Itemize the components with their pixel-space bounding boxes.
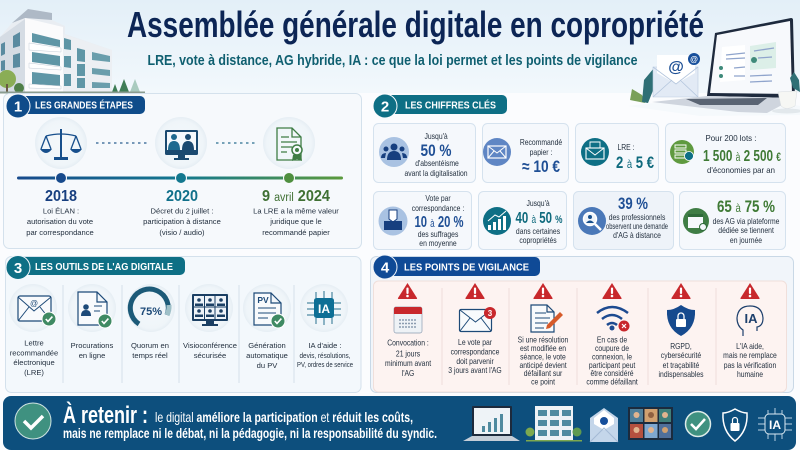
tool: lettre recommandée: recommandée bbox=[10, 348, 58, 358]
icon: coins bbox=[670, 140, 694, 164]
stat card: économies: 1 500 à 2 500 € bbox=[703, 148, 781, 165]
milestone 2020 bbox=[143, 188, 221, 237]
tool: IA d'aide: devis, résolutions, bbox=[300, 353, 351, 360]
tool: IA d'aide bbox=[297, 284, 353, 369]
icon: magnifier bbox=[578, 207, 606, 235]
tool: visioconférence sécurisée: Visioconférence bbox=[183, 341, 237, 350]
dotted connector bbox=[216, 142, 256, 144]
vigilance: résolution modifiée: séance, le vote bbox=[520, 352, 566, 362]
tool: génération du PV: automatique bbox=[246, 351, 288, 360]
icon: calendar clock bbox=[683, 208, 709, 234]
vigilance: vote par correspondance: 3 jours avant l'AG bbox=[448, 365, 502, 375]
icon: group of people bbox=[379, 137, 409, 167]
vigilance: résolution modifiée: Si une résolution bbox=[518, 335, 568, 345]
milestone 2020: 2020 bbox=[166, 188, 198, 205]
icon: balance bbox=[35, 117, 87, 169]
tool: quorum 75 % gauge: Quorum en bbox=[131, 341, 169, 350]
illustration: laptop, envelope, plants and cup: @ bbox=[690, 55, 698, 64]
milestone 2018: 2018 bbox=[45, 188, 77, 205]
icon: video grid bbox=[628, 407, 673, 440]
icon: building bbox=[526, 406, 582, 442]
vigilance: convocation: 21 jours bbox=[396, 349, 420, 359]
stat card: économies: d'économies par an bbox=[707, 165, 775, 175]
vigilance: coupure de connexion: être considéré bbox=[590, 368, 634, 378]
illustration: laptop, envelope, plants and cup: @ bbox=[668, 59, 684, 76]
heading: les points de vigilance: LES POINTS DE VIGILANCE bbox=[404, 262, 529, 274]
tool: génération du PV: Génération bbox=[248, 341, 286, 350]
tool: quorum 75 % gauge: 75% bbox=[140, 306, 162, 318]
vigilance: IA bbox=[723, 283, 777, 379]
heading: les outils bbox=[6, 256, 185, 280]
vigilance: résolution modifiée: défaillant sur bbox=[524, 368, 563, 378]
vigilance: RGPD bbox=[659, 283, 704, 379]
heading: les points de vigilance: 4 bbox=[381, 260, 390, 276]
tool: lettre recommandée: électronique bbox=[13, 358, 55, 367]
vigilance: convocation bbox=[385, 283, 432, 378]
vigilance: résolution modifiée bbox=[518, 283, 568, 387]
tool: lettre recommandée: (LRE) bbox=[24, 368, 44, 377]
tool: lettre recommandée bbox=[9, 284, 58, 377]
stat card: recommandé papier: ≈ 10 € bbox=[522, 157, 560, 176]
tool: quorum 75 % gauge bbox=[127, 284, 175, 360]
vigilance: convocation: l'AG bbox=[402, 368, 414, 378]
stat card: 65 à 75 %: des AG via plateforme bbox=[713, 216, 779, 226]
icon: certified document bbox=[263, 117, 315, 169]
stat card: LRE: 2 à 5 € bbox=[616, 153, 654, 172]
icon: visioconference bbox=[155, 117, 207, 169]
heading: les points de vigilance bbox=[373, 255, 540, 279]
stat card: vote par correspondance: des suffrages bbox=[418, 229, 459, 239]
vigilance: résolution modifiée: anticipé devient bbox=[519, 360, 568, 370]
heading: les outils: LES OUTILS DE L'AG DIGITALE bbox=[35, 262, 173, 273]
stat card: 65 à 75 % bbox=[680, 192, 786, 250]
vigilance: IA: L'IA aide, bbox=[736, 341, 764, 351]
icon: IA chip bbox=[758, 408, 792, 441]
stat card: vote par correspondance: en moyenne bbox=[419, 238, 457, 248]
key message: À retenir : bbox=[63, 401, 148, 429]
stat card: 50 % absentéisme: Jusqu'à bbox=[424, 131, 448, 141]
vigilance: IA: mais ne remplace bbox=[723, 350, 777, 360]
icon: green check bbox=[686, 412, 710, 436]
tool: lettre recommandée: Lettre bbox=[24, 338, 44, 348]
vigilance: RGPD: cybersécurité bbox=[661, 350, 701, 360]
vigilance: coupure de connexion: comme défaillant bbox=[586, 377, 639, 387]
tool: quorum 75 % gauge: temps réel bbox=[132, 351, 168, 360]
banner: à retenir bbox=[3, 396, 796, 450]
vigilance: coupure de connexion: participant peut bbox=[589, 360, 636, 370]
panel 4: les points de vigilance bbox=[370, 255, 794, 392]
vigilance dividers bbox=[442, 288, 716, 385]
stat card: 50 % absentéisme: 50 % bbox=[420, 141, 452, 160]
tool: procurations en ligne bbox=[68, 284, 116, 360]
stat card: recommandé papier bbox=[482, 124, 568, 182]
vigilance: convocation: minimum avant bbox=[385, 358, 432, 368]
stat card: 39 %: observent une demande bbox=[606, 222, 668, 231]
stat card: LRE: LRE : bbox=[618, 142, 634, 152]
vigilance: vote par correspondance: doit parvenir bbox=[456, 356, 494, 366]
stat card: vote par correspondance bbox=[374, 192, 472, 250]
vigilance: IA: humaine bbox=[737, 369, 763, 379]
illustration: laptop, envelope, plants and cup bbox=[628, 18, 800, 116]
key message bbox=[63, 401, 437, 441]
key message: mais ne remplace ni le débat, ni la pédagogie, ni la responsabilité du syndic. bbox=[63, 425, 437, 441]
key message: le digital améliore la participation et réduit les coûts, bbox=[155, 409, 413, 425]
stat card: 65 à 75 %: 65 à 75 % bbox=[717, 197, 775, 216]
stat card: 39 %: 39 % bbox=[618, 194, 648, 213]
stat card: LRE bbox=[576, 124, 658, 182]
stat card: 39 % bbox=[574, 192, 674, 250]
tool: visioconférence sécurisée bbox=[183, 284, 237, 360]
stat card: 40 à 50 %: Jusqu'à bbox=[526, 198, 550, 208]
vigilance: coupure de connexion: connexion, le bbox=[592, 352, 632, 362]
tool dividers bbox=[63, 285, 294, 383]
stat card: 50 % absentéisme bbox=[374, 124, 476, 182]
timeline bbox=[17, 172, 343, 184]
tool: procurations en ligne: Procurations bbox=[71, 341, 114, 350]
heading: les outils: 3 bbox=[14, 260, 22, 277]
stat card: recommandé papier: papier : bbox=[530, 147, 552, 157]
heading: les grandes étapes bbox=[6, 94, 145, 118]
stat card: 40 à 50 %: copropriétés bbox=[519, 235, 557, 245]
vigilance: coupure de connexion bbox=[586, 283, 639, 387]
stat card: 65 à 75 %: en journée bbox=[730, 235, 762, 245]
stat card: 40 à 50 %: 40 à 50 % bbox=[516, 210, 563, 227]
icon: rising chart bbox=[483, 207, 511, 235]
milestone 2018 bbox=[26, 188, 94, 237]
vigilance: vote par correspondance bbox=[448, 283, 502, 375]
tool: lettre recommandée: @ bbox=[30, 299, 38, 308]
tool: IA d'aide: IA d'aide : bbox=[308, 341, 342, 350]
vigilance: coupure de connexion: coupure de bbox=[595, 343, 629, 353]
tool: IA d'aide: IA bbox=[318, 302, 330, 316]
icon: ballot box bbox=[378, 206, 408, 236]
vigilance: IA: pas la vérification bbox=[724, 360, 776, 370]
vigilance: résolution modifiée: est modifiée en bbox=[520, 343, 566, 353]
vigilance: résolution modifiée: ce point bbox=[531, 377, 556, 387]
icon: laptop chart bbox=[463, 406, 520, 441]
milestone 2024 bbox=[253, 188, 339, 237]
stat card: recommandé papier: Recommandé bbox=[520, 137, 562, 147]
heading: les grandes étapes: 1 bbox=[14, 98, 22, 116]
milestone 2024: La LRE a la même valeur bbox=[253, 206, 339, 216]
header band bbox=[0, 0, 800, 93]
vigilance: RGPD: et traçabilité bbox=[663, 360, 699, 370]
inner alert area bbox=[374, 281, 786, 392]
milestone 2020: (visio / audio) bbox=[159, 228, 205, 237]
panel 3: les outils de l'AG digitale bbox=[6, 256, 361, 392]
panel 1: les grandes étapes bbox=[4, 94, 362, 248]
heading: les chiffres clés: 2 bbox=[381, 98, 389, 116]
illustration: apartment building bbox=[0, 9, 145, 94]
milestone 2024: juridique que le bbox=[269, 217, 322, 226]
icon: IA chip: IA bbox=[769, 418, 781, 432]
stat card: 39 %: d'AG à distance bbox=[613, 230, 661, 240]
dotted connector bbox=[96, 142, 148, 144]
vigilance: RGPD: RGPD, bbox=[670, 341, 692, 351]
icon: check mark bbox=[15, 403, 51, 439]
milestone 2018: par correspondance bbox=[26, 228, 94, 237]
milestone 2024: recommandé papier bbox=[262, 228, 330, 237]
tool: IA d'aide: PV, ordres de service bbox=[297, 362, 353, 369]
stat card: économies: Pour 200 lots : bbox=[706, 133, 756, 143]
vigilance: vote par correspondance: 3 bbox=[488, 309, 493, 318]
stat card: 50 % absentéisme: d'absentéisme bbox=[415, 158, 459, 168]
milestone 2020: Décret du 2 juillet : bbox=[151, 206, 213, 216]
stat card: 40 à 50 % bbox=[478, 192, 566, 250]
vigilance: IA: IA bbox=[744, 311, 758, 326]
milestone 2018: autorisation du vote bbox=[27, 217, 93, 226]
stat card: 50 % absentéisme: avant la digitalisation bbox=[404, 168, 468, 178]
stat card: 39 %: des professionnels bbox=[609, 212, 666, 222]
stat card: vote par correspondance: Vote par bbox=[425, 193, 451, 203]
stat card: 40 à 50 %: dans certaines bbox=[516, 226, 560, 236]
milestone 2020: participation à distance bbox=[143, 217, 221, 226]
milestone 2024: 9 avril 2024 bbox=[262, 188, 330, 205]
heading: les grandes étapes: LES GRANDES ÉTAPES bbox=[35, 98, 133, 112]
tool: génération du PV bbox=[243, 284, 291, 370]
heading: les chiffres clés bbox=[373, 94, 507, 118]
vigilance: RGPD: indispensables bbox=[659, 369, 704, 379]
panel 2: les chiffres clés bbox=[373, 94, 786, 250]
tool: procurations en ligne: en ligne bbox=[79, 351, 105, 360]
icon: shield lock bbox=[723, 409, 747, 441]
heading: les chiffres clés: LES CHIFFRES CLÉS bbox=[405, 98, 496, 112]
tool: génération du PV: PV bbox=[257, 295, 269, 305]
tool: génération du PV: du PV bbox=[257, 361, 278, 370]
stat card: économies bbox=[666, 124, 786, 182]
vigilance: vote par correspondance: Le vote par bbox=[458, 337, 493, 347]
vigilance: vote par correspondance: correspondance bbox=[451, 347, 499, 357]
stat card: vote par correspondance: 10 à 20 % bbox=[414, 214, 464, 231]
vigilance: coupure de connexion: En cas de bbox=[597, 335, 627, 345]
milestone 2018: Loi ÉLAN : bbox=[43, 206, 79, 216]
vigilance: convocation: Convocation : bbox=[387, 338, 429, 348]
icon: LRE envelope bbox=[581, 138, 609, 166]
icon: mail at bbox=[590, 408, 618, 442]
stat card: vote par correspondance: correspondance : bbox=[412, 203, 464, 213]
stat card: 65 à 75 %: dédiée se tiennent bbox=[718, 225, 775, 235]
subtitle: LRE, vote à distance, AG hybride, IA : ce que la loi permet et les points de vigilance bbox=[148, 52, 638, 69]
tool: visioconférence sécurisée: sécurisée bbox=[194, 351, 226, 360]
icon: envelope bbox=[483, 138, 511, 166]
